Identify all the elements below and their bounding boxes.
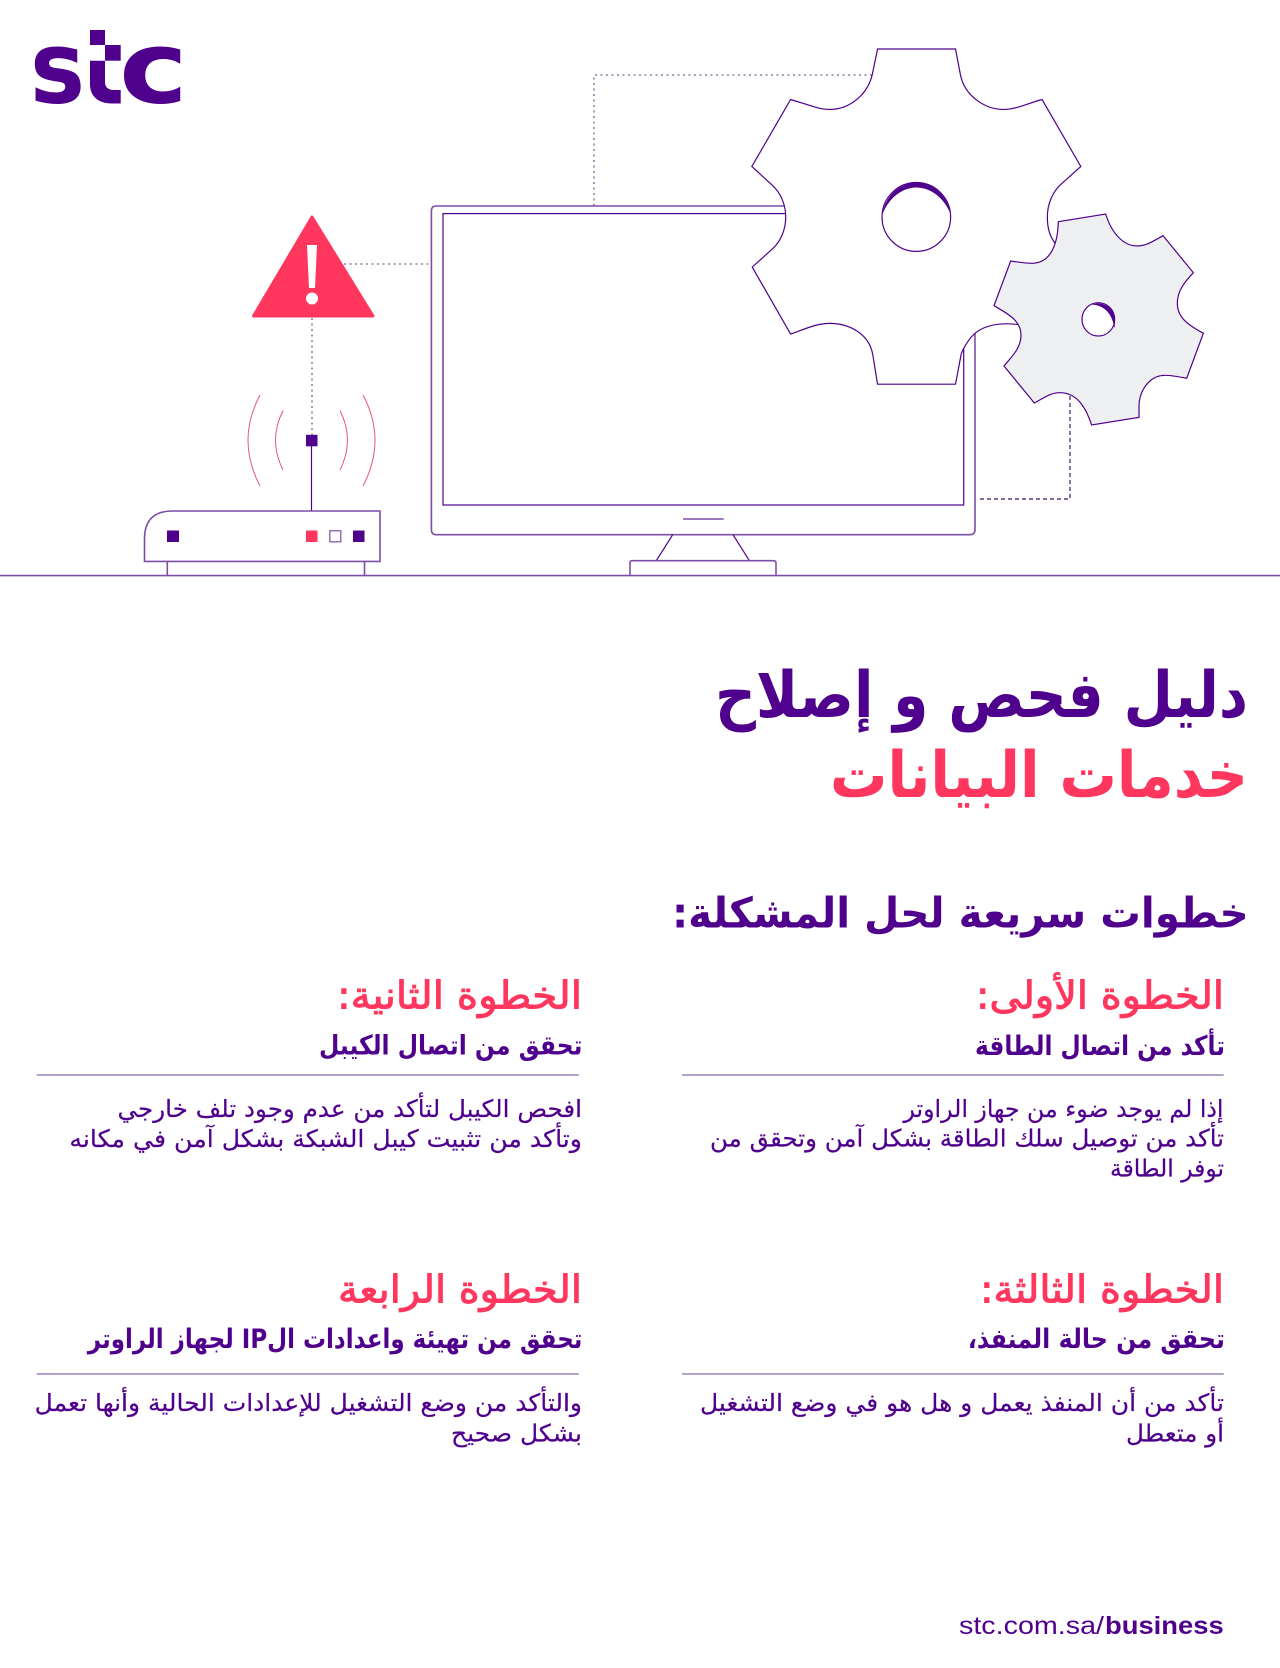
panel: step 1: الخطوة الأولى: <box>976 972 1224 1019</box>
title <box>715 659 1248 813</box>
panel: step 4: بشكل صحيح <box>451 1420 582 1448</box>
illustration: large gear <box>752 49 1081 384</box>
panel: step 1: توفر الطاقة <box>1110 1154 1224 1182</box>
panel: step 1: تأكد من توصيل سلك الطاقة بشكل آمن وتحقق من <box>710 1122 1224 1152</box>
panel: step 4 <box>35 1268 582 1448</box>
footer url: stc.com.sa/ <box>959 1612 1104 1640</box>
panel: step 2: وتأكد من تثبيت كيبل الشبكة بشكل آمن في مكانه <box>69 1122 582 1153</box>
panel: step 1 <box>682 972 1225 1182</box>
illustration: monitor <box>431 206 975 576</box>
footer url <box>959 1612 1224 1640</box>
icon: router with antenna and signal waves <box>144 395 380 576</box>
panel: step 3: أو متعطل <box>1126 1418 1224 1448</box>
panel: step 2: الخطوة الثانية: <box>337 974 582 1019</box>
icon: warning triangle <box>254 217 373 316</box>
ground line <box>0 575 1280 577</box>
panel: step 2: افحص الكيبل لتأكد من عدم وجود تلف خارجي <box>118 1092 582 1123</box>
illustration: small gear <box>994 214 1203 425</box>
panel: step 3: تحقق من حالة المنفذ، <box>968 1324 1225 1355</box>
panel: step 4: والتأكد من وضع التشغيل للإعدادات الحالية وأنها تعمل <box>35 1386 582 1417</box>
heading: quick steps: خطوات سريعة لحل المشكلة: <box>672 888 1249 938</box>
illustration: connection dotted lines <box>312 75 1070 499</box>
logo: stc: s <box>30 10 85 126</box>
logo: stc <box>30 10 188 126</box>
footer url: business <box>1105 1612 1224 1640</box>
panel: step 2: تحقق من اتصال الكيبل <box>319 1030 582 1062</box>
panel: step 4: تحقق من تهيئة واعدادات الIP لجهاز الراوتر <box>86 1324 582 1355</box>
panel: step 3: الخطوة الثالثة: <box>980 1268 1224 1313</box>
panel: step 4: الخطوة الرابعة <box>338 1268 582 1312</box>
panel: step 2 <box>37 974 582 1153</box>
panel: step 1: تأكد من اتصال الطاقة <box>975 1028 1225 1062</box>
logo: stc: c <box>119 10 188 126</box>
panel: step 3 <box>682 1268 1225 1448</box>
panel: step 3: تأكد من أن المنفذ يعمل و هل هو في وضع التشغيل <box>700 1386 1224 1417</box>
panel: step 1: إذا لم يوجد ضوء من جهاز الراوتر <box>903 1095 1224 1124</box>
